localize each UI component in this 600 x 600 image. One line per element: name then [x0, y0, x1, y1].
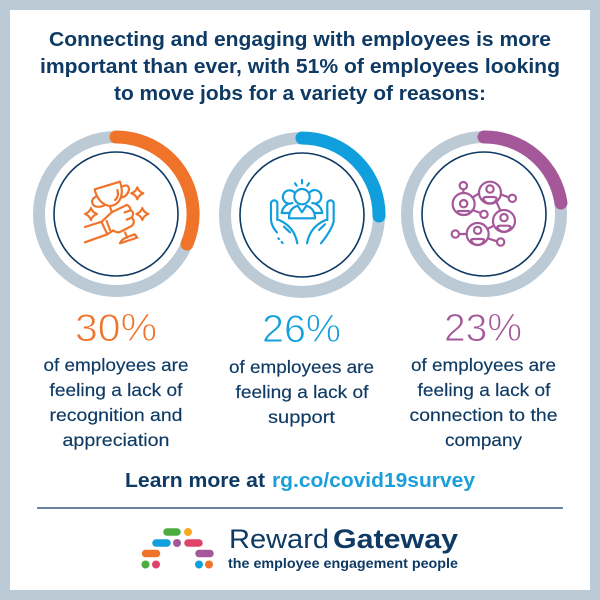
icon: connected people network — [452, 182, 516, 246]
description: recognition: recognition and — [50, 405, 182, 425]
title: to move jobs for a variety of reasons: — [114, 82, 486, 105]
title: Connecting and engaging with employees is more — [49, 28, 551, 51]
title — [40, 28, 560, 105]
stat: 26%: 26% — [262, 308, 341, 351]
description: recognition: of employees are — [44, 355, 188, 375]
tagline: the employee engagement people — [228, 555, 458, 571]
ring chart: 23% — [407, 137, 561, 291]
logo: Reward Gateway: Gateway — [333, 524, 458, 554]
logo: Reward Gateway — [142, 524, 458, 571]
call to action: rg.co/covid19survey — [272, 470, 476, 492]
description: recognition — [44, 355, 188, 450]
panel: support — [225, 138, 379, 427]
call to action: Learn more at — [125, 470, 265, 492]
description: connection: of employees are — [411, 355, 556, 375]
description: connection: connection to the — [410, 405, 558, 425]
description: support: of employees are — [229, 357, 374, 377]
description: connection: feeling a lack of — [418, 380, 551, 400]
stat: 30%: 30% — [75, 307, 157, 350]
ring chart: 26% — [225, 138, 379, 292]
description: connection — [410, 355, 558, 450]
description: connection: company — [445, 430, 522, 450]
description: support: support — [268, 407, 335, 427]
icon: hands holding people — [271, 180, 334, 243]
call to action — [125, 470, 476, 492]
ring chart: 30% — [39, 137, 193, 291]
panel: connection — [407, 137, 561, 450]
description: recognition: appreciation — [62, 430, 170, 450]
description: recognition: feeling a lack of — [50, 380, 183, 400]
description: support — [229, 357, 374, 427]
description: support: feeling a lack of — [236, 382, 369, 402]
stat: 23%: 23% — [444, 307, 522, 350]
icon: trophy in fist — [85, 182, 148, 243]
logo mark — [142, 528, 213, 568]
panel: recognition — [39, 137, 193, 450]
wordmark: Reward — [229, 524, 329, 554]
title: important than ever, with 51% of employees looking — [40, 55, 560, 78]
